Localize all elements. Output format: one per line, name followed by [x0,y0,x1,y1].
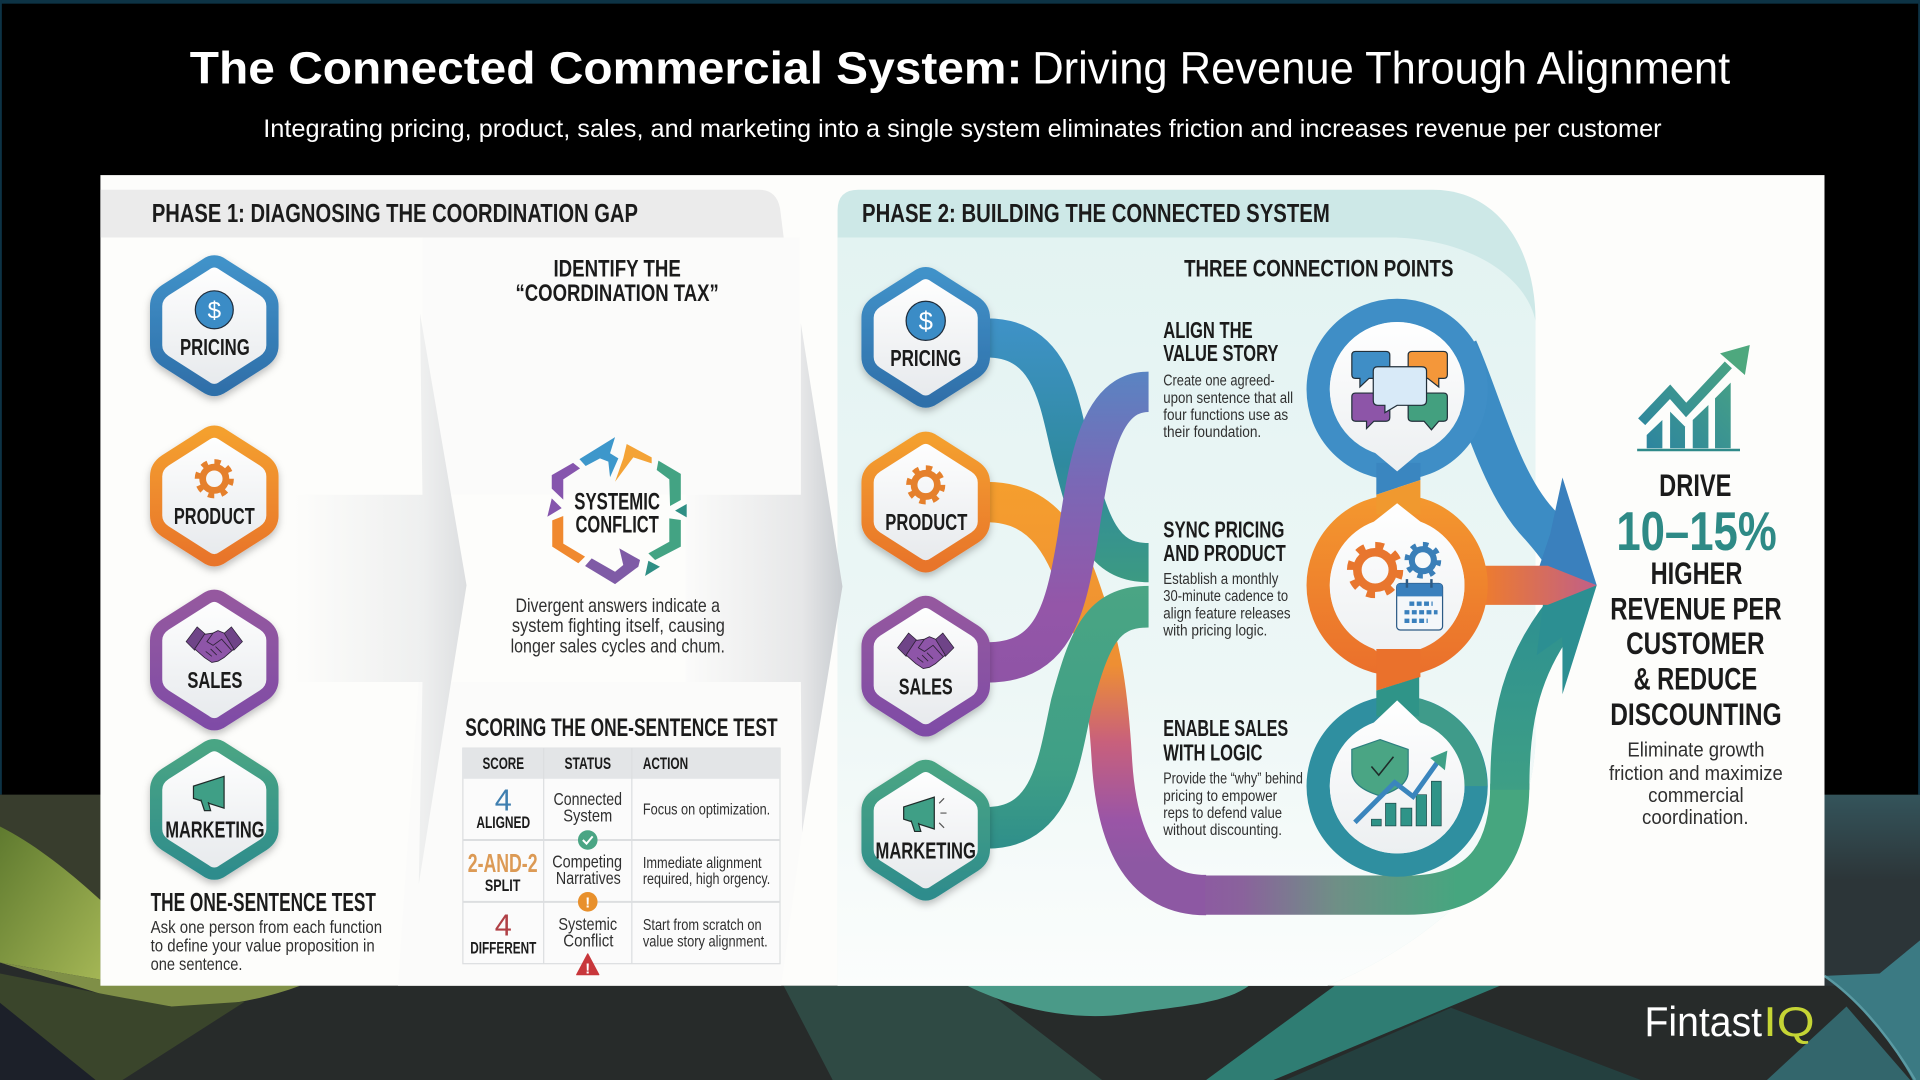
phase 1 header band: PHASE 1: DIAGNOSING THE COORDINATION GAP [152,200,638,228]
text block: enable sales with logic: Provide the “why” behind [1163,771,1303,788]
icon: chat bubbles [1352,351,1447,430]
hexagon: product [868,438,984,566]
icon: warning dot [578,892,598,912]
ribbon: sales [987,392,1149,662]
phase 2 function hexagons [868,273,984,894]
result statement: DISCOUNTING [1610,696,1782,732]
text block: sync pricing and product [1162,517,1291,640]
heading: identify the coordination tax: IDENTIFY THE [553,256,681,283]
title: The Connected Commercial System: [190,42,1022,93]
text block: align the value story [1163,317,1293,441]
text block: sync pricing and product: AND PRODUCT [1163,540,1286,566]
text block: align the value story: Create one agreed- [1163,373,1275,390]
text block: the one-sentence test [151,889,382,974]
text block: align the value story: upon sentence that all [1163,390,1293,407]
text block: align the value story: ALIGN THE [1163,317,1253,343]
text block: eliminate growth friction: Eliminate growth [1627,740,1764,762]
table: scoring the one-sentence test: SPLIT [485,876,520,895]
result statement [1610,467,1782,732]
icon: growth chart [1637,345,1750,450]
phase 1 function hexagons [156,261,272,874]
hexagon: pricing: PRICING [890,345,961,371]
panel: phase 1 column shading [294,238,802,986]
text block: align the value story: VALUE STORY [1163,340,1278,366]
phase 1 header band [100,190,784,238]
text block: enable sales with logic: WITH LOGIC [1163,739,1262,765]
hexagon: sales [868,602,984,730]
table: scoring the one-sentence test: SCORE [482,754,524,773]
table: scoring the one-sentence test: Narratives [556,868,621,888]
result statement: 10–15% [1616,500,1777,562]
panel: infographic card [100,175,1824,986]
text block: the one-sentence test: Ask one person from each function [151,917,382,937]
text block: sync pricing and product: 30-minute cadence to [1163,588,1288,605]
text block: align the value story: their foundation. [1163,424,1261,441]
text block: enable sales with logic [1162,715,1303,839]
text block: sync pricing and product: SYNC PRICING [1163,517,1284,543]
hexagon: marketing [868,766,984,894]
flow ribbons [987,338,1573,895]
icon: systemic conflict broken hexagon: SYSTEMIC [574,488,660,515]
table: scoring the one-sentence test: value story alignment. [643,934,768,951]
heading: scoring table: SCORING THE ONE-SENTENCE TEST [465,714,778,742]
table: scoring the one-sentence test: Conflict [563,931,614,951]
icon: rising chart [1355,751,1447,826]
hexagon: pricing: PRICING [180,334,250,360]
text block: sync pricing and product: with pricing logic. [1162,623,1267,640]
result statement: REVENUE PER [1610,591,1782,627]
table: scoring the one-sentence test: ACTION [643,754,688,773]
subtitle: Integrating pricing, product, sales, and marketing into a single system eliminates friction and increases revenue per customer [263,115,1662,143]
table: scoring the one-sentence test: 4 [495,784,512,818]
connection point: sync pricing and product [1318,480,1476,670]
text block: divergent answers [511,596,725,658]
ribbon: pricing [987,338,1149,563]
hexagon: sales: SALES [899,673,953,699]
text block: the one-sentence test: one sentence. [151,954,242,974]
icon: alert triangle: ! [585,961,590,977]
icon: calendar [1397,579,1443,630]
hexagon: sales [156,596,272,724]
text block: enable sales with logic: ENABLE SALES [1163,715,1288,741]
arrow: combined flow into result [1457,349,1597,694]
text block: divergent answers: system fighting itself, causing [512,616,725,637]
hexagon: product: PRODUCT [885,509,967,535]
text block: enable sales with logic: pricing to empower [1163,788,1278,805]
result statement: CUSTOMER [1626,625,1764,661]
hexagon: pricing: $ [919,308,933,336]
hexagon: pricing [868,273,984,402]
icon: shield [1352,740,1408,796]
text block: sync pricing and product: Establish a monthly [1163,571,1278,588]
icon: systemic conflict broken hexagon: CONFLICT [576,512,659,539]
table: scoring the one-sentence test [463,748,780,977]
text block: eliminate growth friction: friction and maximize [1609,763,1783,785]
heading: three connection points: THREE CONNECTION POINTS [1184,256,1453,283]
icon: alert triangle [577,954,599,977]
text block: enable sales with logic: without discounting. [1162,822,1282,839]
ribbon: product into bottom loop [987,502,1206,895]
connection point: align the value story [1318,310,1476,495]
table: scoring the one-sentence test: ALIGNED [476,813,530,832]
text block: enable sales with logic: reps to defend value [1163,805,1282,822]
ribbon: loop up to arrow [1510,600,1573,790]
table: scoring the one-sentence test: Connected [553,789,622,809]
hexagon: marketing [156,745,272,874]
connection point: enable sales with logic [1318,649,1476,865]
table: scoring the one-sentence test: Immediate alignment [643,855,762,872]
table: scoring the one-sentence test: 4 [495,909,512,943]
text block: eliminate growth friction: commercial [1648,785,1744,807]
text block: the one-sentence test: THE ONE-SENTENCE TEST [151,889,376,917]
text block: eliminate growth friction: coordination. [1642,807,1749,829]
icon: systemic conflict broken hexagon [547,437,687,584]
text block: eliminate growth friction [1609,740,1783,829]
text block: the one-sentence test: to define your value proposition in [151,935,375,955]
table: scoring the one-sentence test: Start from scratch on [643,917,762,934]
result statement: HIGHER [1651,555,1742,591]
logo: FintastIQ: Fintast [1644,998,1762,1045]
hexagon: sales: SALES [187,667,242,693]
ribbon: bottom loop across [1205,784,1510,895]
phase 2 heading: PHASE 2: BUILDING THE CONNECTED SYSTEM [862,200,1330,228]
text block: divergent answers: Divergent answers indicate a [516,596,720,617]
panel: arrow into phase 2 [686,323,842,833]
text block: divergent answers: longer sales cycles and chum. [511,637,725,658]
table: scoring the one-sentence test: required, high orgency. [643,871,770,888]
result statement: & REDUCE [1633,660,1757,696]
title: Driving Revenue Through Alignment [1032,42,1731,93]
table: scoring the one-sentence test: STATUS [564,754,611,773]
table: scoring the one-sentence test: Competing [552,852,622,872]
icon: small gear [1407,544,1439,576]
table: scoring the one-sentence test: System [563,806,612,826]
table: scoring the one-sentence test: Systemic [558,914,618,934]
logo: FintastIQ: IQ [1763,998,1815,1045]
panel: phase 2 background [838,190,1536,986]
result statement: DRIVE [1659,467,1731,503]
title [190,42,1731,93]
table: scoring the one-sentence test: Focus on optimization. [643,801,770,818]
hexagon: product: PRODUCT [174,503,255,529]
icon: large gear [1351,546,1400,594]
ribbon: marketing [987,607,1149,828]
hexagon: marketing: MARKETING [165,817,264,843]
hexagon: product [156,432,272,560]
table: scoring the one-sentence test: DIFFERENT [470,938,536,957]
text block: sync pricing and product: align feature releases [1163,605,1291,622]
table: scoring the one-sentence test: 2-AND-2 [468,850,538,878]
heading: identify the coordination tax [516,256,719,307]
heading: identify the coordination tax: “COORDINATION TAX” [516,280,719,307]
text block: align the value story: four functions use as [1163,407,1288,424]
icon: warning dot: ! [585,895,590,911]
hexagon: pricing: $ [207,297,221,324]
hexagon: marketing: MARKETING [876,837,976,863]
icon: check [578,830,598,850]
hexagon: pricing [156,261,272,390]
